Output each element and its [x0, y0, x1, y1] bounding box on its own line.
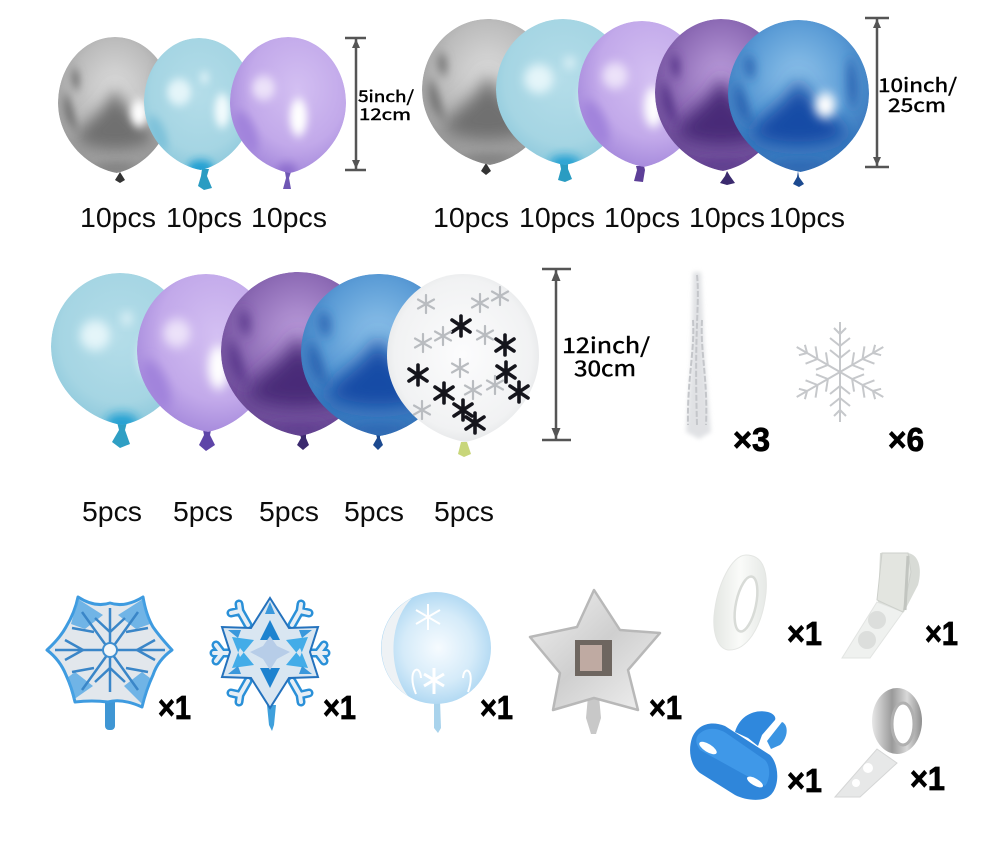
quantity: x1: ×1 — [158, 689, 191, 726]
balloon pump tool — [690, 711, 787, 800]
quantity labels: 10 inch: 10pcs — [689, 202, 765, 233]
balloon decorating strip — [835, 688, 922, 797]
quantity labels: 5 inch: 10pcs — [166, 202, 242, 233]
balloon: teal 12 inch — [51, 273, 164, 448]
icon: hanging snowflake — [792, 322, 888, 422]
balloon: lilac 10 inch — [578, 21, 680, 182]
quantity labels: 12 inch — [82, 496, 494, 527]
quantity: x1: ×1 — [323, 689, 356, 726]
balloon: lilac 5 inch — [229, 37, 346, 189]
balloon: clear with snowflake confetti — [387, 274, 539, 457]
quantity labels: 12 inch: 5pcs — [173, 496, 233, 527]
quantity: x1: ×1 — [787, 615, 822, 652]
tinsel with quantity — [686, 272, 770, 458]
balloon: teal 5 inch — [144, 38, 242, 190]
size marker: 12 inch: 12inch/ — [562, 330, 650, 360]
balloon: purple 10 inch — [655, 19, 759, 185]
quantity: x3: ×3 — [733, 421, 770, 458]
quantity labels: 10 inch: 10pcs — [769, 202, 845, 233]
size marker: 10 inch: 10inch/ — [878, 71, 958, 98]
snowflake ornament with quantity — [792, 322, 924, 458]
quantity: x1: ×1 — [787, 762, 822, 799]
foil balloon: frosted hexagon snowflake — [47, 597, 172, 730]
ribbon roll — [714, 555, 766, 650]
balloon group: 12 inch balloons — [51, 272, 539, 457]
size marker: 10 inch — [865, 18, 958, 167]
quantity labels: 12 inch: 5pcs — [82, 496, 142, 527]
balloon group: 5 inch balloons — [58, 37, 346, 190]
quantity: x1: ×1 — [910, 760, 945, 797]
size marker: 10 inch: 25cm — [888, 91, 946, 118]
balloon: blue 10 inch — [728, 20, 869, 187]
quantity labels: 5 inch: 10pcs — [80, 202, 156, 233]
size marker: 12 inch — [542, 269, 650, 440]
quantity labels: 5 inch — [80, 202, 327, 233]
balloon: blue 12 inch — [301, 274, 421, 450]
size marker: 5 inch: 12cm — [359, 101, 411, 125]
quantity labels: 12 inch: 5pcs — [259, 496, 319, 527]
quantity labels: 12 inch: 5pcs — [344, 496, 404, 527]
size marker: 12 inch: 30cm — [574, 353, 636, 383]
quantity: x1: ×1 — [480, 689, 513, 726]
quantity labels: 12 inch: 5pcs — [434, 496, 494, 527]
size marker: 5 inch: 5inch/ — [358, 83, 415, 107]
quantity labels: 5 inch: 10pcs — [251, 202, 327, 233]
quantity labels: 10 inch: 10pcs — [604, 202, 680, 233]
balloon group: 10 inch balloons — [422, 19, 869, 187]
balloon: purple 12 inch — [221, 272, 340, 450]
quantity: x1: ×1 — [649, 689, 682, 726]
foil balloon: frosted orb — [381, 592, 491, 733]
balloon: silver 5 inch — [58, 37, 158, 183]
balloon: teal 10 inch — [496, 19, 604, 182]
quantity labels: 10 inch — [433, 202, 845, 233]
foil balloon: blue snowflake — [214, 598, 326, 731]
balloon: lilac 12 inch — [137, 274, 248, 451]
glue dot roll — [842, 553, 920, 658]
foil balloon: silver star — [530, 590, 660, 734]
icon: silver tinsel — [686, 272, 711, 439]
quantity: x6: ×6 — [888, 421, 924, 458]
quantity labels: 10 inch: 10pcs — [433, 202, 509, 233]
size marker: 5 inch — [345, 38, 415, 170]
balloon: silver 10 inch — [422, 19, 526, 175]
quantity labels: 10 inch: 10pcs — [519, 202, 595, 233]
quantity: x1: ×1 — [925, 615, 958, 652]
